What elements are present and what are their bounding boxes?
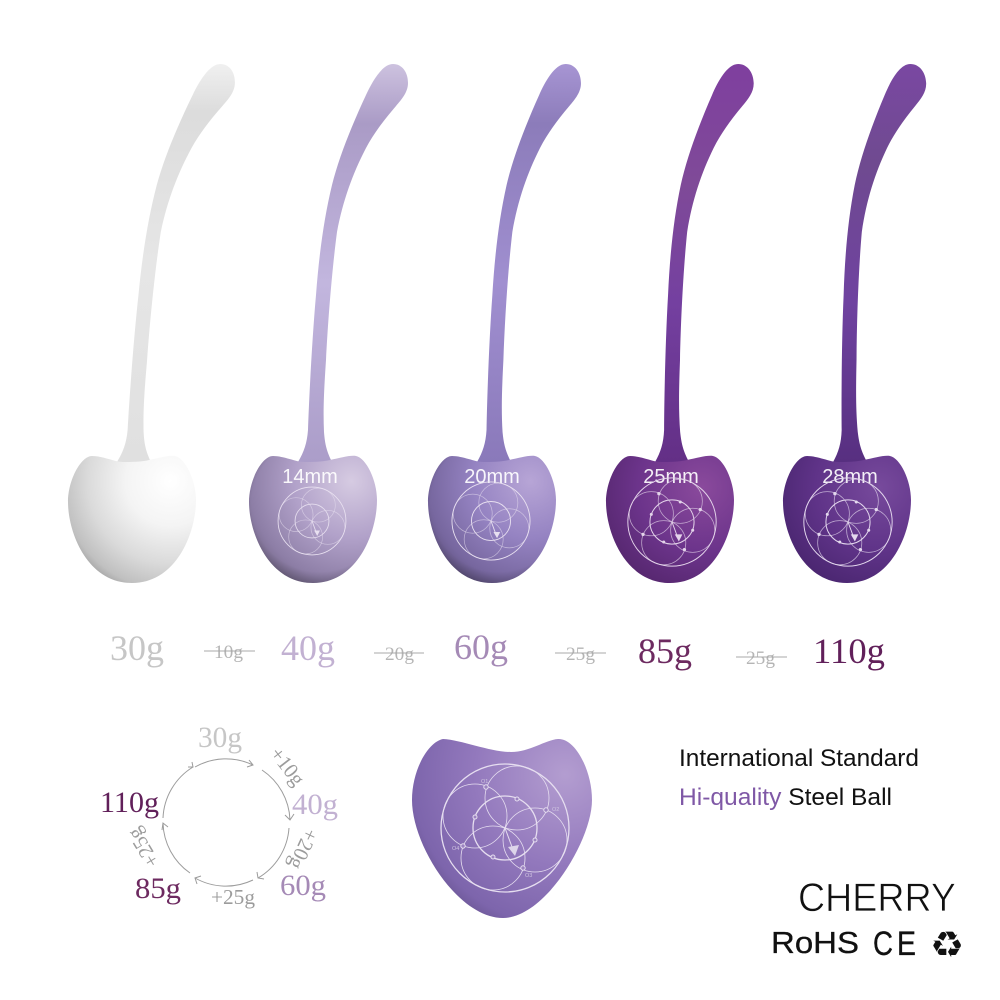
- CE mark: [873, 925, 916, 963]
- steel ball diagram: O1: [481, 779, 488, 785]
- label: 28mm: 28mm: [822, 466, 878, 488]
- steel ball diagram: [278, 487, 346, 555]
- text: international standard: International Standard: [679, 745, 919, 772]
- weight progression row: 30g: [110, 628, 164, 668]
- RoHS mark: RoHS: [771, 925, 859, 960]
- weight progression row: 110g: [813, 631, 885, 671]
- cycle weights: 30g: [198, 721, 242, 754]
- weight cycle diagram: 60g: [280, 869, 326, 902]
- weight progression row: 10g: [214, 642, 244, 663]
- steel ball diagram: [804, 478, 892, 566]
- weight cycle diagram: +25g: [211, 885, 256, 909]
- steel ball diagram: [628, 478, 716, 566]
- weight progression row: 40g: [281, 628, 335, 668]
- steel ball diagram: O3: [525, 873, 532, 879]
- icon: recycling symbol: ♻: [930, 925, 964, 966]
- brand name: CHERRY: CHERRY: [798, 876, 956, 920]
- cycle increments: +10g: [265, 742, 310, 791]
- weight cycle diagram: +25g: [122, 823, 164, 872]
- weight cycle diagram: 110g: [100, 786, 159, 819]
- weight cycle diagram: 40g: [292, 788, 338, 821]
- cherry 5: deep purple, 28mm: [783, 64, 943, 583]
- cherry 1: white: [68, 64, 235, 583]
- weight progression row: 85g: [638, 631, 692, 671]
- label: 20mm: 20mm: [464, 466, 520, 488]
- weight progression row: 25g: [566, 644, 596, 665]
- weight cycle diagram: +20g: [284, 825, 323, 874]
- weight progression row: [110, 627, 885, 671]
- steel ball diagram: O2: [552, 807, 559, 813]
- enlarged cherry with steel ball: [412, 739, 592, 918]
- weight cycle diagram: [100, 721, 338, 909]
- weight cycle diagram: 85g: [135, 872, 181, 905]
- steel ball diagram: [452, 482, 530, 560]
- steel ball diagram: O4: [452, 846, 459, 852]
- weight progression row: 25g: [746, 648, 776, 669]
- CE mark: C: [873, 925, 893, 963]
- cherry 3: lavender, 20mm: [428, 64, 587, 583]
- text: hi-quality steel ball: Hi-quality Steel Ball: [679, 784, 892, 811]
- cherry 4: purple, 25mm: [606, 64, 765, 583]
- cycle arrows: [162, 759, 294, 886]
- steel ball diagram: [441, 764, 569, 892]
- label: 14mm: 14mm: [282, 466, 338, 488]
- weight progression row: 20g: [385, 644, 415, 665]
- label: 25mm: 25mm: [643, 466, 699, 488]
- CE mark: E: [897, 925, 916, 963]
- cherry 2: pale lilac, 14mm: [249, 64, 408, 583]
- weight progression row: 60g: [454, 627, 508, 667]
